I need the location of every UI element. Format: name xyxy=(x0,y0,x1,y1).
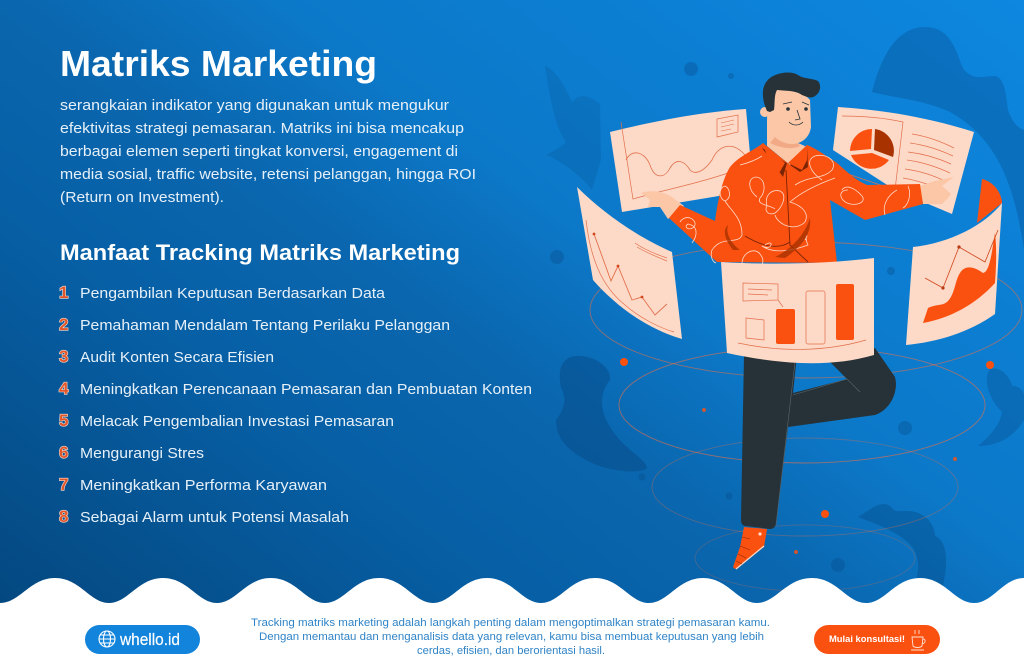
figure: right hand xyxy=(920,177,954,204)
icon: coffee cup xyxy=(911,630,925,650)
figure: legs xyxy=(741,348,896,529)
call to action button xyxy=(814,625,940,654)
intro paragraph: serangkaian indikator yang digunakan untuk mengukur xyxy=(60,97,449,114)
footer text: Tracking matriks marketing adalah langkah penting dalam mengoptimalkan strategi pemasaran kamu. xyxy=(251,617,770,629)
figure: shirt xyxy=(669,143,923,264)
orbit rings xyxy=(590,242,1022,591)
benefits list: Mengurangi Stres xyxy=(80,445,204,462)
benefits list: Pengambilan Keputusan Berdasarkan Data xyxy=(80,285,386,302)
list numbers: 8 xyxy=(59,507,68,526)
list numbers: 5 xyxy=(59,411,68,430)
list numbers: 6 xyxy=(59,443,68,462)
list numbers: 3 xyxy=(59,347,68,366)
intro paragraph: (Return on Investment). xyxy=(60,189,224,206)
subheading: Manfaat Tracking Matriks Marketing xyxy=(60,240,460,265)
illustration: man with marketing dashboards xyxy=(577,73,1002,569)
panel: area chart right xyxy=(906,179,1002,345)
panel: line chart top-left xyxy=(610,109,755,212)
list numbers xyxy=(59,283,69,526)
footer text: cerdas, efisien, dan berorientasi hasil. xyxy=(417,645,605,657)
panel: falling line chart left xyxy=(577,187,682,339)
call to action button: Mulai konsultasi! xyxy=(829,634,905,645)
intro paragraph: berbagai elemen seperti tingkat konversi, engagement di xyxy=(60,143,458,160)
list numbers: 4 xyxy=(59,379,69,398)
figure: shoe xyxy=(733,527,767,569)
logo button xyxy=(85,625,200,654)
intro paragraph: media sosial, traffic website, retensi pelanggan, hingga ROI xyxy=(60,166,476,183)
logo button: whello.id xyxy=(119,630,180,649)
figure: left hand xyxy=(641,191,684,219)
benefits list: Audit Konten Secara Efisien xyxy=(80,349,274,366)
benefits list: Meningkatkan Perencanaan Pemasaran dan Pembuatan Konten xyxy=(80,381,532,398)
background blobs xyxy=(545,27,1024,602)
white wave footer xyxy=(0,578,1024,670)
panel: bar chart centre xyxy=(721,258,874,363)
intro paragraph xyxy=(60,97,476,206)
list numbers: 7 xyxy=(59,475,68,494)
icon: globe xyxy=(99,631,115,647)
list numbers: 2 xyxy=(59,315,68,334)
intro paragraph: efektivitas strategi pemasaran. Matriks ini bisa mencakup xyxy=(60,120,464,137)
benefits list: Meningkatkan Performa Karyawan xyxy=(80,477,327,494)
figure: head and neck xyxy=(760,73,820,165)
list numbers: 1 xyxy=(59,283,68,302)
benefits list: Sebagai Alarm untuk Potensi Masalah xyxy=(80,509,349,526)
panel: pie chart top-right xyxy=(833,107,974,214)
footer text xyxy=(251,617,770,657)
orange dots xyxy=(620,358,994,554)
footer text: Dengan memantau dan menganalisis data yang relevan, kamu bisa membuat keputusan yang lebih xyxy=(259,631,764,643)
benefits list: Melacak Pengembalian Investasi Pemasaran xyxy=(80,413,394,430)
benefits list: Pemahaman Mendalam Tentang Perilaku Pelanggan xyxy=(80,317,450,334)
title: Matriks Marketing xyxy=(60,43,377,84)
benefits list xyxy=(59,283,532,526)
